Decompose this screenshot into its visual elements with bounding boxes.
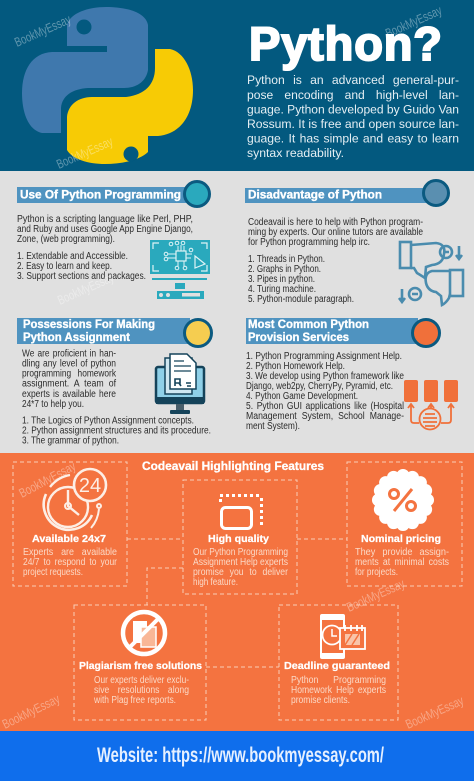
text block: 4. Python Game Development. <box>246 391 358 402</box>
panel: possessions for making python assignment <box>17 317 212 446</box>
text block: 2. Graphs in Python. <box>248 264 321 275</box>
text block: Django, web2py, CherryPy, Pyramid, etc. <box>246 381 393 392</box>
icon: percent badge <box>372 469 434 531</box>
heading bar <box>17 182 210 206</box>
card: deadline guaranteed <box>279 605 398 720</box>
text block: 1. Extendable and Accessible. <box>17 251 128 262</box>
panel: most common python provision services <box>246 317 458 432</box>
card: nominal pricing <box>347 462 462 586</box>
heading: Nominal pricing <box>361 533 441 545</box>
text block <box>22 349 211 446</box>
body: Our Python Programming <box>193 547 288 558</box>
text block: assignment. A team of <box>22 378 116 390</box>
panel: highlighting features <box>0 453 474 731</box>
body: Our experts deliver exclu- <box>94 675 189 686</box>
watermarks: BookMyEssay <box>16 458 78 501</box>
body <box>23 547 118 578</box>
heading bar: Most Common Python <box>248 317 369 331</box>
card: available 24x7 <box>13 462 127 586</box>
icon: devices network <box>404 380 458 430</box>
icon: frame <box>220 496 262 528</box>
text block: 3. Support sections and packages. <box>17 271 146 282</box>
heading bar: Possessions For Making <box>23 317 155 331</box>
footer: website <box>0 731 474 781</box>
text block: 3. The grammar of python. <box>22 436 119 446</box>
body: project requests. <box>23 567 83 578</box>
text block: 3. We develop using Python framework like <box>246 371 404 382</box>
text block: 1. Python Programming Assignment Help. <box>246 351 402 362</box>
body: for projects. <box>355 567 398 578</box>
intro text: guage. Python developed by Guido Van <box>247 102 459 116</box>
heading bar: Disadvantage of Python <box>248 188 382 202</box>
body <box>93 675 189 706</box>
card: high quality <box>183 480 297 594</box>
body: Assignment Help experts <box>193 557 288 568</box>
body <box>193 547 289 588</box>
icon: document on monitor <box>156 354 204 414</box>
watermarks: BookMyEssay <box>54 133 115 172</box>
icon: clock 24: 24 <box>79 475 101 497</box>
text block: experts is available here <box>22 389 116 400</box>
heading: Plagiarism free solutions <box>79 660 202 672</box>
heading bar <box>245 180 448 206</box>
body: Experts are available <box>23 547 117 558</box>
text block: Python is a scripting language like Perl, PHP, <box>17 214 193 225</box>
text block <box>246 351 404 432</box>
text block: 2. Python Homework Help. <box>246 361 345 372</box>
heading bar: Python Assignment <box>23 330 130 344</box>
text block: dling any level of python <box>22 358 116 370</box>
body: high feature. <box>193 577 238 588</box>
intro text <box>247 73 459 160</box>
text block: 2. Easy to learn and keep. <box>17 261 112 272</box>
body: promise you to deliver <box>193 567 289 578</box>
body <box>291 675 386 706</box>
heading: High quality <box>208 533 269 545</box>
body: sive resolutions along <box>94 685 189 696</box>
text block: programming homework <box>22 368 117 380</box>
watermarks: BookMyEssay <box>0 691 62 732</box>
icon: no plagiarism <box>123 612 165 654</box>
intro text: pose encoding and high-level lan- <box>247 88 459 102</box>
text block: and Ruby and uses Google App Engine Django, <box>17 224 193 235</box>
heading: Codeavail Highlighting Features <box>142 461 324 473</box>
intro text: guage. It has simple and easy to learn <box>247 132 459 146</box>
body <box>355 547 449 578</box>
heading bar <box>246 317 440 346</box>
title: Python? <box>249 17 442 70</box>
intro text: Rossum. It is free and open source lan- <box>247 117 459 131</box>
text block: for Python programming help irc. <box>248 237 370 248</box>
body: Python Programming <box>291 675 386 686</box>
heading bar <box>17 317 212 346</box>
body: ments at minimal costs <box>355 557 449 568</box>
heading: Deadline guaranteed <box>284 660 390 672</box>
heading: Available 24x7 <box>32 533 106 545</box>
icon: thumbs down <box>399 242 463 305</box>
panel: use of python programming <box>17 182 210 299</box>
heading bar: Provision Services <box>248 330 349 344</box>
watermarks: BookMyEssay <box>344 576 407 615</box>
body: with Plag free reports. <box>93 695 176 706</box>
text block <box>17 214 193 282</box>
text block: Management System, School Manage- <box>246 411 404 422</box>
heading bar: Use Of Python Programming <box>20 188 181 202</box>
text block: ment System). <box>246 421 300 432</box>
text block: 4. Turing machine. <box>248 284 316 295</box>
text block: 1. Threads in Python. <box>248 254 325 265</box>
body: promise clients. <box>291 695 350 706</box>
watermarks: BookMyEssay <box>55 269 116 308</box>
text block <box>248 217 423 305</box>
text block: Codeavail is here to help with Python program- <box>248 217 423 228</box>
text block: Zone, (web programming). <box>17 234 115 245</box>
text block: 24*7 to help you. <box>22 399 84 410</box>
watermarks: BookMyEssay <box>12 11 73 50</box>
text block: 5. Python GUI applications like (Hospital <box>246 401 404 412</box>
card: plagiarism free solutions <box>74 605 206 720</box>
text block: 1. The Logics of Python Assignment concepts. <box>22 416 194 426</box>
text block: We are proficient in han- <box>22 349 116 360</box>
intro text: Python is an advanced general-pur- <box>247 73 459 87</box>
icon: phone clock calendar <box>320 614 365 659</box>
body: 24/7 to respond to your <box>23 557 118 568</box>
icon: circuit monitor <box>150 240 210 299</box>
icon: python logo <box>22 7 193 164</box>
text block: 3. Pipes in python. <box>248 274 315 285</box>
body: They provide assign- <box>355 547 449 558</box>
panel: disadvantage of python <box>245 180 463 305</box>
text block: ming by experts. Our online tutors are available <box>248 227 423 238</box>
text block: 2. Python assignment structures and its procedure. <box>22 426 211 436</box>
intro text: syntax readability. <box>247 146 344 160</box>
panel: header <box>0 0 474 171</box>
text block: 5. Python-module paragraph. <box>248 294 354 305</box>
body: Homework Help experts <box>291 685 386 696</box>
